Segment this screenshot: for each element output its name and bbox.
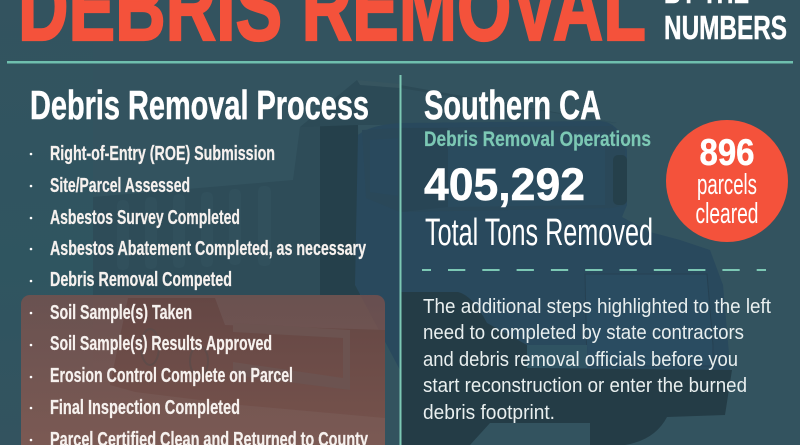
heading: debris removal process: Debris Removal Process [30,82,369,128]
process list: Right-of-Entry (ROE) Submission [50,143,275,165]
truck: windshield frame [362,126,625,212]
process list: Debris Removal Competed [50,269,232,291]
badge: parcels cleared: parcels [697,169,757,201]
badge: parcels cleared [666,120,788,242]
stat: total tons: 405,292 [424,159,585,210]
truck: dump body [93,125,358,295]
truck: bumper [400,292,732,445]
process list [30,143,369,445]
process list: Final Inspection Completed [50,397,240,419]
explanatory paragraph: and debris removal officials before you [423,349,738,371]
process list: Soil Sample(s) Results Approved [50,333,272,355]
explanatory paragraph: start reconstruction or enter the burned [423,375,747,397]
truck: cab side [320,125,360,295]
stat: total tons: Total Tons Removed [425,212,653,254]
explanatory paragraph [423,296,771,424]
truck: windshield [448,132,605,207]
truck: lower body under highlight [110,298,385,418]
explanatory paragraph: debris footprint. [423,402,555,424]
badge: parcels cleared: 896 [700,132,754,173]
heading: southern ca: Southern CA [424,82,601,128]
process list: Site/Parcel Assessed [50,175,190,197]
truck: grille [585,274,713,366]
process list: Soil Sample(s) Taken [50,302,192,324]
process list: Asbestos Survey Completed [50,207,240,229]
truck: mirror [613,155,627,205]
highlight box [21,295,385,445]
headlights [141,329,208,376]
truck: roof [300,80,617,127]
process list: Erosion Control Complete on Parcel [50,365,293,387]
subheading: debris removal operations: Debris Removal Operations [424,127,651,151]
bumper bar [233,323,350,390]
truck: body ribs [117,186,271,270]
badge: parcels cleared: cleared [696,198,758,230]
stat: total tons [424,159,653,254]
explanatory paragraph: The additional steps highlighted to the left [423,296,771,318]
truck: cab front [355,121,730,370]
process list: Asbestos Abatement Completed, as necessary [50,238,367,260]
explanatory paragraph: need to completed by state contractors [423,322,744,344]
truck silhouette [93,80,732,445]
truck: side window [370,138,398,196]
